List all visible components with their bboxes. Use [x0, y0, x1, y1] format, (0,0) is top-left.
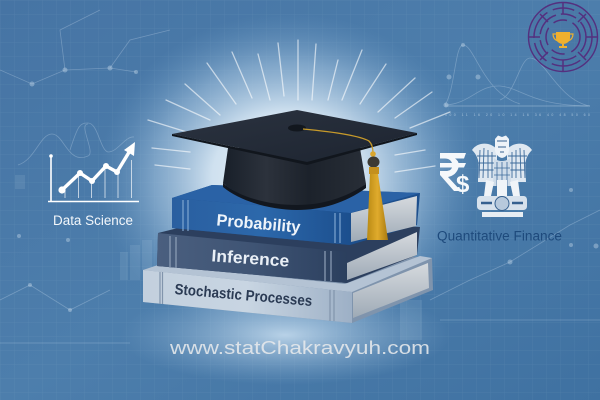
- centre lion: [493, 136, 511, 186]
- book: probability: [172, 185, 420, 245]
- icon: data science line chart: [48, 142, 139, 202]
- label: stochastic processes: Stochastic Processes: [174, 281, 313, 310]
- cap base: [223, 148, 366, 207]
- cap board: [172, 110, 417, 162]
- trophy: [553, 32, 573, 48]
- right lion: [507, 144, 532, 182]
- logo: maze with trophy: [528, 2, 598, 72]
- icon: national emblem: [472, 136, 532, 217]
- left lion: [472, 144, 497, 182]
- label: probability: Probability: [216, 211, 302, 237]
- lion legs: [484, 180, 520, 196]
- label: data science: Data Science: [53, 213, 133, 228]
- icon: rupee and dollar: $: [456, 171, 470, 198]
- distribution curves axis: 100 11 16 20 10 14 16 36 40 48 50 60: [445, 113, 590, 117]
- book: inference: [157, 215, 420, 283]
- label: quantitative finance: Quantitative Finance: [437, 228, 562, 244]
- book: stochastic processes: [143, 245, 433, 323]
- label: inference: Inference: [211, 246, 290, 271]
- sun rays: [148, 40, 450, 172]
- graduation cap: [172, 110, 417, 240]
- website url: www.statChakravyuh.com: [169, 337, 430, 358]
- icon: rupee and dollar: [440, 153, 470, 198]
- tassel: [303, 129, 388, 240]
- button: [288, 124, 306, 132]
- abacus base and wheel: [477, 196, 527, 217]
